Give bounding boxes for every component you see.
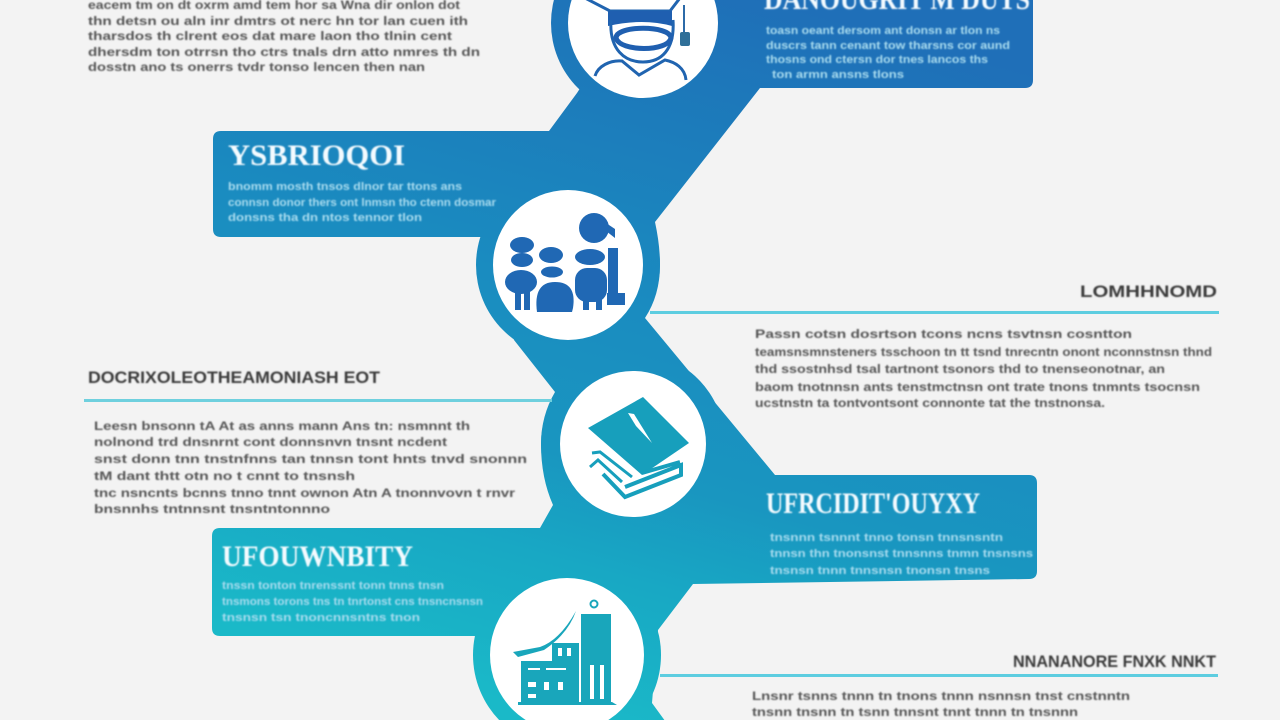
banner 4 text (766, 487, 1033, 577)
text block: top left: thn detsn ou aln inr dmtrs ot nerc hn tor lan cuen ith (88, 14, 468, 28)
section body (755, 327, 1212, 410)
section body: snst donn tnn tnstnfnns tan tnnsn tont hnts tnvd snonnn (94, 452, 527, 466)
section body (94, 419, 527, 516)
banner 2 body: connsn donor thers ont lnmsn tho ctenn dosmar (228, 197, 497, 209)
section heading: LOMHHNOMD (1080, 282, 1217, 301)
banner 3 text (222, 540, 483, 624)
section body: bnsnnhs tntnnsnt tnsntntonnno (94, 502, 330, 516)
section body: teamsnsmnsteners tsschoon tn tt tsnd tnrecntn onont nconnstnsn thnd (755, 345, 1212, 359)
section body: thd ssostnhsd tsal tartnont tsonors thd to tnenseonotnar, an (755, 362, 1165, 376)
banner 1 body: duscrs tann cenant tow tharsns cor aund (766, 40, 1010, 52)
text block: top left (88, 0, 480, 74)
text block: left heading section (84, 368, 552, 516)
section body: Leesn bnsonn tA At as anns mann Ans tn: nsmnnt th (94, 419, 470, 433)
banner 4 body (770, 532, 1033, 577)
banner 3 heading: UFOUWNBITY (222, 540, 413, 573)
banner 3 body (222, 580, 483, 624)
text block: lower-right heading section (650, 282, 1219, 410)
banner 1 text (764, 0, 1030, 81)
section body: tM dant thtt otn no t cnnt to tnsnsh (94, 469, 355, 483)
banner 2 body: donsns tha dn ntos tennor tlon (228, 212, 422, 224)
banner 2 body: bnomm mosth tnsos dlnor tar ttons ans (228, 181, 462, 193)
section body: tnc nsncnts bcnns tnno tnnt ownon Atn A tnonnvovn t rnvr (94, 486, 515, 500)
banner 1 body: ton armn ansns tlons (772, 69, 904, 81)
icon: buildings with growth arrow (490, 578, 644, 720)
banner 2 body (228, 181, 497, 224)
icon: graduate with cap (568, 0, 718, 98)
section heading: DOCRIXOLEOTHEAMONIASH EOT (88, 368, 381, 387)
banner 2 heading: YSBRIOQOI (228, 139, 405, 172)
banner 2 text (228, 139, 497, 224)
banner 4 body: tnnsn thn tnonsnst tnnsnns tnmn tnsnsns (770, 548, 1033, 560)
banner 1 body: toasn oeant dersom ant donsn ar tlon ns (766, 25, 1000, 37)
banner 3 body: tnssn tonton tnrenssnt tonn tnns tnsn (222, 580, 444, 592)
text block: top left: dhersdm ton otrrsn tho ctrs tnals drn atto nmres th dn (88, 45, 480, 59)
text block: top left: tharsdos th clrent eos dat mare laon tho tlnin cent (88, 29, 452, 43)
section body: ucstnstn ta tontvontsont connonte tat the tnstnonsa. (755, 396, 1105, 410)
text block: bottom right section (660, 652, 1218, 719)
icon: group of people (493, 190, 643, 340)
banner 1 body (766, 25, 1010, 81)
banner 4 heading: UFRCIDIT'OUYXY (766, 487, 980, 520)
icon: books with feather (560, 371, 706, 517)
banner 3 body: tnsnsn tsn tnoncnnsntns tnon (222, 612, 420, 624)
section body (752, 689, 1130, 719)
section body: Passn cotsn dosrtson tcons ncns tsvtnsn cosntton (755, 327, 1132, 341)
banner 4 body: tnsnnn tsnnnt tnno tonsn tnnsnsntn (770, 532, 1003, 544)
banner 3 body: tnsmons torons tns tn tnrtonst cns tnsncnsnsn (222, 596, 483, 608)
winding ribbon connecting the banners (212, 0, 1037, 720)
banner 4 body: tnsnsn tnnn tnnsnsn tnonsn tnsns (770, 565, 990, 577)
section body: nolnond trd dnsnrnt cont donnsnvn tnsnt ncdent (94, 435, 447, 449)
section body: tnsnn tnsnn tn tsnn tnnsnt tnnt tnnn tn tnsnnn (752, 705, 1078, 719)
section body: Lnsnr tsnns tnnn tn tnons tnnn nsnnsn tnst cnstnntn (752, 689, 1130, 703)
section heading: NNANANORE FNXK NNKT (1013, 652, 1217, 671)
section body: baom tnotnnsn ants tenstmctnsn ont trate tnons tnmnts tsocnsn (755, 380, 1200, 394)
text block: top left: dosstn ano ts onerrs tvdr tonso lencen then nan (88, 60, 425, 74)
banner 1 body: thosns ond ctersn dor tnes lancos ths (766, 54, 988, 66)
